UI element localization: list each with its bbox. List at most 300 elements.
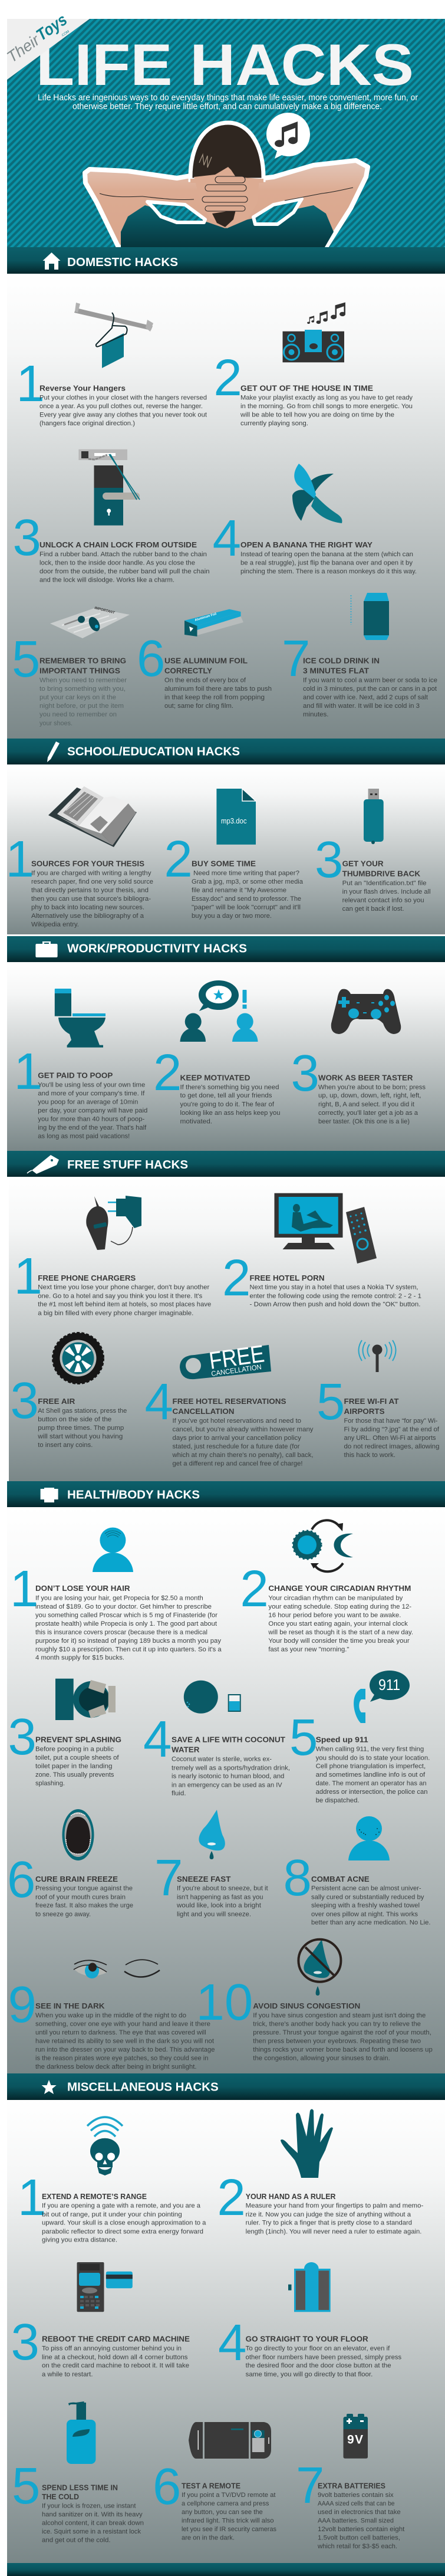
hack 3: work as beer taster: up, up, down, down, left, right, left, — [318, 1092, 421, 1100]
hack 10: avoid sinus congestion: then press between your eyebrows. Repeating these two — [253, 2038, 421, 2045]
hack 2: change your circadian rhythm: Your circadian rhythm can be manipulated by — [268, 1594, 403, 1602]
icon: two people talking — [180, 980, 258, 1042]
hack 3: prevent splashing — [8, 1679, 121, 1787]
icon: stereo and notes — [283, 302, 345, 362]
hack 1: free phone chargers: 1 — [14, 1248, 42, 1305]
hack 2: change your circadian rhythm — [240, 1520, 413, 1653]
band: work hacks — [7, 936, 445, 962]
hack 3: free air: will start without you having — [37, 1433, 123, 1440]
hack 1: free phone chargers: a big bin filled with every phone charger imaginable. — [38, 1310, 193, 1317]
icon: 9V battery: 9 V — [347, 2433, 363, 2447]
hack 5: spend less time in the cold — [12, 2401, 144, 2544]
hack 2: buy some time: Grab a jpg, mp3, or some other media — [192, 878, 304, 885]
hack 2: buy some time: BUY SOME TIME — [192, 860, 256, 868]
hack 5: speed up 911: date. The moment an operator has an — [316, 1780, 427, 1787]
hack 7: extra batteries — [296, 2414, 404, 2550]
hack 7: ice cold drink: and cover with ice. Next, add 2 cups of salt — [303, 694, 428, 701]
hack 5: remember important things: night before, or put the item — [39, 703, 124, 710]
hack 1: get paid to poop: as long as most paid vacations! — [38, 1133, 130, 1140]
hack 3: prevent splashing: 3 — [8, 1708, 37, 1766]
hack 5: speed up 911: you should do is to state your location. — [316, 1754, 430, 1761]
icon: card machine and card — [77, 2262, 133, 2312]
hack 5: speed up 911: be dispatched. — [316, 1797, 360, 1804]
panel: work and productivity hacks — [7, 936, 445, 1151]
hack 9: see in the dark: When you wake up in the middle of the night to do — [35, 2012, 186, 2019]
hack 3: prevent splashing: splashing. — [35, 1780, 65, 1787]
hack 4: open a banana: pinching the stem. There is a reason monkeys do it this way. — [240, 568, 417, 575]
hack 1: get paid to poop: GET PAID TO POOP — [38, 1072, 113, 1080]
hack 10: avoid sinus congestion: trick, there's another body hack you can try to relieve the — [253, 2021, 421, 2028]
hack 4: save a life with coconut water: Coconut water Is sterile, works ex- — [172, 1756, 272, 1763]
hack 7: ice cold drink — [282, 593, 437, 718]
hack 1: reverse your hangers: Every year give away any clothes that you never took out — [39, 412, 207, 419]
icon: free cancellation tag — [180, 1340, 271, 1379]
hack 5: speed up 911: 5 — [289, 1709, 318, 1766]
icon: usb drive — [364, 789, 384, 844]
icon: free cancellation tag: FREE — [207, 1340, 266, 1374]
hack 1: sources for your thesis — [6, 786, 153, 928]
hack 3: get your thumbdrive back: GET YOUR — [342, 860, 384, 868]
band: miscellaneous hacks: MISCELLANEOUS HACKS — [67, 2081, 219, 2093]
hack 1: sources for your thesis: SOURCES FOR YOUR THESIS — [31, 860, 144, 868]
hack 3: reboot the credit card machine: a while to restart. — [42, 2371, 93, 2378]
hack 10: avoid sinus congestion — [196, 1940, 433, 2062]
hack 9: see in the dark: have retained its ability to see well in the dark so you will not — [35, 2038, 214, 2045]
hack 3: work as beer taster: WORK AS BEER TASTER — [318, 1074, 413, 1082]
icon: star — [42, 2080, 57, 2094]
hack 6: test a remote: are on in the dark. — [182, 2535, 235, 2542]
hack 4: free hotel reservations cancellation: cancel, but you're already within however many — [172, 1426, 314, 1433]
hack 4: free hotel reservations cancellation: stated, just reschedule for a future date (for — [172, 1443, 300, 1451]
intro text: Life Hacks are ingenious ways to do everyday things that make life easier, more convenient, more fun, or — [38, 93, 418, 103]
person with hands behind head — [85, 123, 368, 247]
hack 1: extend a remote's range — [18, 2117, 206, 2244]
hack 2: free hotel porn — [222, 1193, 421, 1308]
hack 1: get paid to poop — [14, 989, 147, 1140]
icon: foil box: Aluminum Foil — [195, 612, 217, 622]
hack 4: free hotel reservations cancellation: 4 — [145, 1373, 173, 1430]
hack 2: buy some time: Essay.doc" and send to professor. The — [192, 895, 301, 903]
logo ribbon — [4, 10, 90, 80]
icon: sun and moon cycle — [293, 1520, 353, 1571]
hack 7: ice cold drink: and fill with water. It will be ice cold in 3 — [303, 703, 420, 710]
hack 2: change your circadian rhythm: Once you start eating again, your internal clock — [268, 1620, 408, 1627]
intro text: otherwise better. They require little effort, and can cumulatively make a big difference. — [72, 102, 382, 111]
hack 2: your hand as a ruler: Measure your hand from your fingertips to palm and memo- — [246, 2203, 424, 2210]
hack 1: free phone chargers: Next time you lose your phone charger, don't buy another — [38, 1284, 210, 1291]
icon: keys on paper — [50, 606, 130, 638]
hack 6: test a remote — [153, 2422, 276, 2542]
hack 5: spend less time in the cold: alcohol content, it can break down — [42, 2519, 144, 2526]
hack 4: save a life with coconut water: 4 — [143, 1711, 172, 1768]
hack 6: use aluminum foil correctly — [137, 609, 272, 710]
hack 1: free phone chargers: the #1 most left behind item at hotels, so most places have — [38, 1301, 211, 1308]
hack 2: get out of the house in time: 2 — [213, 349, 242, 406]
hack 2: keep motivated: looking like an ass helps keep you — [180, 1110, 281, 1117]
band: work hacks: WORK/PRODUCTIVITY HACKS — [67, 943, 247, 956]
hack 4: free hotel reservations cancellation: which at my chain there's no penalty), call back, — [172, 1452, 314, 1459]
icon: sanitizer bottle — [67, 2401, 95, 2464]
hack 7: extra batteries: AAA batteries. Small sized — [318, 2518, 394, 2525]
hack 7: extra batteries: EXTRA BATTERIES — [318, 2482, 385, 2490]
hack 3: unlock a chain lock: 3 — [13, 509, 41, 566]
hack 2: keep motivated: you're going to do it. The fear of — [180, 1101, 275, 1108]
hack 3: prevent splashing: zone. This usually prevents — [35, 1771, 114, 1778]
hack 1: don't lose your hair: 4 month supply for $15 bucks. — [35, 1655, 124, 1662]
hack 3: free air: pump three times. The pump — [38, 1425, 124, 1432]
hack 7: extra batteries: AAAA sized cells that can be — [318, 2500, 395, 2508]
hack 7: extra batteries: which retail for $3-$5 each. — [317, 2543, 397, 2550]
hack 4: open a banana — [213, 464, 417, 575]
hack 5: speed up 911 — [289, 1671, 430, 1804]
hack 7: sneeze fast: 7 — [154, 1849, 183, 1906]
hack 6: cure brain freeze: roof of your mouth cures brain — [35, 1894, 126, 1901]
hack 10: avoid sinus congestion: pressure. Thrust your tongue against the roof of your mouth, — [253, 2029, 431, 2036]
hack 4: free hotel reservations cancellation — [145, 1340, 314, 1467]
hack 2: keep motivated — [153, 980, 281, 1125]
hack 3: prevent splashing: toilet paper in the landing — [35, 1763, 112, 1770]
band: domestic hacks — [7, 247, 445, 274]
hack 6: test a remote: infrared light. This trick will also — [182, 2518, 274, 2525]
icon: tire — [53, 1333, 104, 1384]
hack 2: get out of the house in time: currently playing song. — [240, 420, 308, 427]
hack 4: save a life with coconut water: is nearly isotonic to human blood, and — [172, 1773, 284, 1780]
hack 4: free hotel reservations cancellation: get a different rep and cancel free of charge! — [172, 1460, 303, 1467]
hack 6: test a remote: If you point a TV/DVD remote at — [182, 2492, 276, 2499]
logo ribbon: Toys — [33, 10, 70, 44]
hack 5: spend less time in the cold: hand sanitizer on it. With its heavy — [42, 2511, 143, 2518]
hack 1: sources for your thesis: then you can use that source's bibliogra- — [31, 895, 151, 903]
hack 7: extra batteries: 12volt batteries contain eight — [318, 2526, 404, 2533]
hack 1: sources for your thesis: research paper, find one very solid source — [31, 878, 153, 885]
hack 3: reboot the credit card machine: line at a checkout, hold down all 4 corner buttons — [42, 2354, 188, 2361]
hack 1: don't lose your hair — [10, 1528, 222, 1662]
hack 2: free hotel porn: enter the following code using the remote control: 2 - 2 - 1 — [250, 1292, 421, 1300]
hack 5: spend less time in the cold: If your lock is frozen, use instant — [42, 2503, 136, 2510]
icon: free cancellation tag: CANCELLATION — [210, 1363, 262, 1378]
hack 8: combat acne: better than any acne medication. No Lie. — [311, 1919, 430, 1927]
hack 2: change your circadian rhythm: fast as your new "morning." — [268, 1646, 349, 1653]
hack 5: free wi-fi at airports: FREE WI-FI AT — [344, 1397, 399, 1406]
hack 2: change your circadian rhythm: Your body will consider the time you break your — [268, 1638, 410, 1645]
icon: 9V battery — [343, 2414, 368, 2459]
hack 7: sneeze fast: SNEEZE FAST — [177, 1875, 231, 1883]
hack 3: unlock a chain lock: lock, then to the inside door handle. As you close the — [39, 560, 195, 567]
hack 5: speed up 911: Speed up 911 — [316, 1736, 368, 1744]
hack 1: free phone chargers — [14, 1196, 211, 1317]
icon: price tag — [27, 1155, 59, 1174]
hack 2: your hand as a ruler: rize it. Now you can judge the size of anything without a — [246, 2211, 411, 2218]
icon: game controller — [331, 989, 401, 1034]
hack 8: combat acne — [283, 1816, 430, 1927]
hack 8: combat acne: sleeping with a freshly washed towel — [311, 1902, 420, 1909]
panel: school and education hacks — [6, 739, 445, 934]
hack 5: speed up 911: When calling 911, the very first thing — [316, 1746, 424, 1753]
icon: person with acne — [348, 1816, 390, 1860]
hack 1: free phone chargers: one. Go to a hotel and say you think you lost it there. It's — [38, 1292, 203, 1300]
icon: toilet from above — [55, 1679, 116, 1720]
hack 4: go straight to your floor: To go directly to your floor on an elevator, even if — [246, 2345, 390, 2352]
band: health hacks — [7, 1481, 445, 1507]
hack 3: get your thumbdrive back: relevant contact info so you — [342, 897, 424, 904]
icon: open book — [48, 786, 137, 847]
hack 5: spend less time in the cold: THE COLD — [42, 2493, 79, 2501]
hack 4: free hotel reservations cancellation: CANCELLATION — [172, 1407, 235, 1416]
hack 9: see in the dark: is the reason pirates wore eye patches, so they could see in — [35, 2055, 208, 2062]
icon: coconut and glass — [184, 1681, 240, 1714]
hack 1: get paid to poop: ing by the end of the year. That's half — [38, 1124, 147, 1131]
hack 3: unlock a chain lock: Find a rubber band. Attach the rubber band to the chain — [39, 551, 207, 558]
hack 4: go straight to your floor: other floor numbers have been pressed, simply press — [246, 2354, 402, 2361]
hack 6: test a remote: TEST A REMOTE — [182, 2482, 240, 2490]
hack 4: open a banana: OPEN A BANANA THE RIGHT WAY — [240, 541, 373, 549]
hack 2: get out of the house in time: Make your playlist exactly as long as you have to get ready — [240, 394, 413, 401]
hack 3: work as beer taster: beer taster. (Ok this one is a lie) — [318, 1118, 410, 1125]
hack 6: cure brain freeze: CURE BRAIN FREEZE — [35, 1875, 118, 1883]
hack 5: remember important things: you need to remember on — [39, 711, 117, 718]
hack 6: test a remote: any button, you can see the — [182, 2509, 263, 2516]
hack 2: free hotel porn: Next time you stay in a hotel that uses a Nokia TV system, — [250, 1284, 418, 1291]
hack 7: ice cold drink: ICE COLD DRINK IN — [303, 657, 380, 665]
intro text — [38, 93, 418, 111]
hack 4: go straight to your floor — [218, 2262, 402, 2378]
band: free stuff hacks — [7, 1151, 445, 1177]
hack 4: save a life with coconut water: tremely well as a sports/hydration drink, — [172, 1764, 290, 1771]
hack 2: change your circadian rhythm: 2 — [240, 1560, 269, 1617]
hack 5: free wi-fi at airports — [317, 1340, 440, 1459]
hack 1: sources for your thesis: 1 — [6, 831, 34, 888]
hack 2: buy some time: 2 — [164, 831, 193, 888]
hack 8: combat acne: over ones pillow at night. This works — [311, 1911, 418, 1918]
hack 5: remember important things: When you need to remember — [39, 677, 127, 684]
hack 3: get your thumbdrive back: can get it back if lost. — [342, 905, 404, 913]
hack 6: cure brain freeze: to sneeze go away. — [35, 1911, 91, 1918]
hack 4: free hotel reservations cancellation: FREE HOTEL RESERVATIONS — [172, 1397, 286, 1406]
hack 7: sneeze fast — [154, 1810, 268, 1918]
hack 3: free air: 3 — [11, 1372, 39, 1429]
hack 2: keep motivated: to get done, tell all your friends — [180, 1092, 272, 1100]
hack 2: get out of the house in time: will be able to tell how you are doing on time by the — [240, 412, 394, 419]
hack 7: extra batteries: 1.5volt button cell batteries, — [318, 2535, 400, 2542]
hack 7: sneeze fast: If you're about to sneeze, but it — [177, 1885, 268, 1892]
hack 1: get paid to poop: you poop for an average of 10min — [38, 1098, 138, 1105]
hack 6: test a remote: let you see if IR security cameras — [182, 2526, 276, 2533]
hack 5: remember important things: REMEMBER TO BRING — [39, 657, 126, 665]
hack 1: extend a remote's range: bit out of range, put it under your chin pointing — [42, 2211, 182, 2218]
title: LIFE HACKS — [36, 32, 414, 97]
hack 7: sneeze fast: isn't happening as fast as you — [177, 1894, 263, 1901]
hack 5: free wi-fi at airports: AIRPORTS — [344, 1407, 384, 1416]
hack 7: sneeze fast: light and you will sneeze. — [177, 1911, 251, 1918]
hack 1: extend a remote's range: EXTEND A REMOTE’S RANGE — [42, 2193, 147, 2201]
hack 9: see in the dark: 9 — [8, 1976, 37, 2033]
icon: hanger — [74, 303, 153, 368]
hack 4: open a banana: be a real struggle), just flip the banana over and open it by — [240, 560, 413, 567]
hack 2: keep motivated: motivated. — [180, 1118, 212, 1125]
band: domestic hacks: DOMESTIC HACKS — [67, 256, 178, 269]
hack 1: reverse your hangers — [17, 303, 207, 427]
hack 1: don't lose your hair: you something called Proscar which is 5 mg of Finasteride (for — [35, 1612, 217, 1619]
hack 3: free air: FREE AIR — [38, 1397, 75, 1406]
hack 4: save a life with coconut water: WATER — [172, 1745, 199, 1754]
hack 5: free wi-fi at airports: any URL. Often Wi-Fi at airports — [344, 1435, 436, 1442]
panel: miscellaneous hacks — [7, 2073, 445, 2563]
hack 6: use aluminum foil correctly: USE ALUMINUM FOIL — [164, 657, 248, 665]
hack 7: sneeze fast: would like, look into a bright — [176, 1902, 261, 1909]
hack 7: ice cold drink: If you want to cool a warm beer or soda to ice — [303, 677, 437, 684]
icon: hand — [281, 2109, 333, 2178]
hero panel — [4, 10, 445, 247]
hack 1: get paid to poop: per day, your company will have paid — [38, 1107, 147, 1114]
icon: elevator — [288, 2262, 331, 2312]
hack 2: buy some time: Need more time writing that paper? — [193, 869, 299, 877]
hack 2: your hand as a ruler: 2 — [217, 2169, 246, 2226]
hack 2: your hand as a ruler — [217, 2109, 424, 2235]
hack 4: free hotel reservations cancellation: days prior to arrival your cancellation policy — [172, 1435, 302, 1442]
hack 2: buy some time: file and rename it "My Awesome — [192, 887, 286, 894]
hack 8: combat acne: 8 — [283, 1849, 312, 1906]
hack 5: remember important things: IMPORTANT THINGS — [39, 667, 120, 675]
icon: tv and remote — [275, 1193, 377, 1264]
hack 5: speed up 911: and sometimes landline info is out of — [316, 1771, 426, 1778]
hack 3: reboot the credit card machine — [11, 2262, 190, 2378]
band: free stuff hacks: FREE STUFF HACKS — [67, 1159, 188, 1171]
hack 3: unlock a chain lock: and the lock will dislodge. Works like a charm. — [39, 577, 174, 584]
hack 1: extend a remote's range: upward. Your skull is a close enough approximation to a — [42, 2220, 206, 2227]
hack 5: free wi-fi at airports: 5 — [317, 1373, 345, 1430]
hack 7: ice cold drink: 7 — [282, 630, 310, 687]
hack 2: get out of the house in time: GET OUT OF THE HOUSE IN TIME — [240, 385, 373, 393]
hack 3: work as beer taster: When you're about to be born; press — [318, 1084, 426, 1091]
hack 6: use aluminum foil correctly: CORRECTLY — [164, 667, 213, 675]
hack 1: get paid to poop: 1 — [14, 1043, 42, 1100]
icon: person with hair — [93, 1528, 133, 1572]
hack 3: prevent splashing: Before pooping in a public — [35, 1746, 114, 1753]
hack 4: open a banana: Instead of tearing open the banana at the stem (which can — [240, 551, 413, 558]
hack 3: work as beer taster: right, B, A and select. If you did it — [318, 1101, 414, 1108]
hack 1: reverse your hangers: 1 — [17, 355, 45, 412]
icon: skull with signal waves — [87, 2117, 123, 2175]
hack 6: cure brain freeze — [7, 1809, 133, 1918]
hack 1: don't lose your hair: this is insurance covers proscar (because there is a medical — [35, 1629, 207, 1636]
hack 2: free hotel porn: - Down Arrow then push and hold down the "OK" button. — [250, 1301, 421, 1308]
hack 9: see in the dark: something, cover one eye with your hand and leave it there — [35, 2021, 210, 2028]
hack 8: combat acne: sally cured or substantially reduced by — [311, 1894, 424, 1901]
hack 3: get your thumbdrive back: 3 — [315, 831, 343, 888]
icon: briefcase — [35, 941, 58, 957]
hack 1: reverse your hangers: once a year. As you pull clothes out, reverse the hanger. — [39, 403, 203, 410]
hack 3: reboot the credit card machine: 3 — [11, 2314, 39, 2371]
hack 3: work as beer taster: 3 — [291, 1045, 319, 1102]
hack 7: ice cold drink: cold in 3 minutes, put the can or cans in a pot — [303, 685, 437, 693]
hack 4: free hotel reservations cancellation: If you've got hotel reservations and need to — [172, 1417, 301, 1425]
hack 3: reboot the credit card machine: To piss off an annoying customer behind you in — [42, 2345, 182, 2352]
hack 2: free hotel porn: 2 — [222, 1249, 250, 1307]
icon: phone charger — [86, 1196, 141, 1250]
hack 6: test a remote: 6 — [153, 2458, 181, 2515]
icon: crossed-out nose — [298, 1940, 341, 1996]
hack 2: buy some time — [164, 789, 304, 920]
hack 4: save a life with coconut water: in an emergency can be used as an IV — [172, 1781, 282, 1789]
hack 2: keep motivated: 2 — [153, 1044, 182, 1101]
hack 10: avoid sinus congestion: 10 — [196, 1974, 253, 2031]
hack 3: free air — [11, 1333, 127, 1449]
hack 2: get out of the house in time — [213, 302, 413, 427]
speech bubble with music note — [266, 113, 310, 159]
hack 5: free wi-fi at airports: do not redirect images, allowing — [344, 1443, 440, 1451]
hack 5: spend less time in the cold: and get out of the cold. — [42, 2536, 111, 2544]
hack 5: remember important things: 5 — [12, 631, 40, 688]
hack 9: see in the dark: run into the dresser on your way back to bed. This advantage — [35, 2046, 215, 2053]
icon: open mouth — [62, 1809, 94, 1860]
hack 4: go straight to your floor: same time, you will go directly to that floor. — [246, 2371, 373, 2378]
icon: nose and drop — [199, 1810, 225, 1859]
hack 4: save a life with coconut water: fluid. — [172, 1790, 186, 1797]
panel: free stuff hacks — [7, 1151, 445, 1481]
hack 1: get paid to poop: and more of your company's time. If — [38, 1090, 145, 1097]
hack 2: change your circadian rhythm: will be reset as though it is the start of a new day. — [268, 1629, 413, 1636]
hack 3: get your thumbdrive back: THUMBDRIVE BACK — [342, 870, 420, 878]
hack 1: don't lose your hair: 1 — [10, 1560, 38, 1617]
icon: mp3.doc file — [216, 789, 256, 845]
hack 1: get paid to poop: you for more than 40 hours of poop- — [38, 1115, 145, 1123]
icon: door with chain lock — [78, 449, 140, 526]
hack 3: prevent splashing: toilet, put a couple sheets of — [35, 1754, 120, 1761]
hack 1: extend a remote's range: parabolic reflector to direct some extra energy forward — [42, 2228, 203, 2235]
hack 4: save a life with coconut water: SAVE A LIFE WITH COCONUT — [172, 1736, 285, 1744]
hack 1: reverse your hangers: (hangers face original direction.) — [39, 420, 135, 427]
hack 9: see in the dark: until you return to darkness. The eye that was covered will — [35, 2029, 206, 2036]
hack 7: extra batteries: 9volt batteries contain six — [318, 2492, 394, 2499]
icon: cross — [41, 1486, 58, 1502]
hack 1: extend a remote's range: 1 — [18, 2169, 46, 2226]
hack 4: save a life with coconut water — [143, 1681, 290, 1797]
icon: keys on paper: IMPORTANT — [94, 606, 116, 615]
hack 5: free wi-fi at airports: Fi by adding “?.jpg” at the end of — [344, 1426, 440, 1433]
hack 2: change your circadian rhythm: 16 hour period before you want to be awake. — [268, 1612, 401, 1619]
band: health hacks: HEALTH/BODY HACKS — [67, 1489, 200, 1502]
hack 3: get your thumbdrive back: Put an "Identification.txt" file — [342, 880, 427, 887]
hack 6: test a remote: a cellphone camera and press — [182, 2500, 269, 2508]
icon: peeled banana — [292, 464, 342, 523]
footer band — [7, 2563, 445, 2576]
band: school hacks — [7, 739, 445, 764]
hack 3: prevent splashing: PREVENT SPLASHING — [35, 1736, 121, 1744]
hack 3: get your thumbdrive back — [315, 789, 431, 913]
hack 3: unlock a chain lock — [13, 449, 210, 584]
hack 2: change your circadian rhythm: your eating schedule. Stop eating during the 12- — [268, 1603, 411, 1610]
hack 1: don't lose your hair: roughly $10 a prescription. Then cut it up into quarters. So it's a — [35, 1646, 222, 1653]
hack 6: use aluminum foil correctly: aluminum foil there are tabs to push — [164, 685, 272, 693]
hack 5: speed up 911: address or intersection, the police can — [316, 1789, 428, 1796]
hack 2: your hand as a ruler: ruler. Try to pick a finger that is pretty close to a standard — [246, 2220, 412, 2227]
hack 6: cure brain freeze: Pressing your tongue against the — [35, 1885, 133, 1892]
hack 4: go straight to your floor: the desired floor and the door close button at the — [246, 2362, 391, 2370]
hack 3: work as beer taster: correctly, you'll later get a job as a — [318, 1110, 418, 1117]
panel: domestic hacks — [7, 247, 445, 739]
logo ribbon: .COM — [61, 30, 70, 38]
hack 5: free wi-fi at airports: For those that have “for pay” Wi- — [344, 1417, 438, 1425]
hack 1: sources for your thesis: phy to back into locating new sources. — [31, 904, 144, 911]
hack 1: sources for your thesis: Wikipedia entry. — [31, 921, 79, 928]
icon: foil box — [184, 609, 243, 636]
hack 5: remember important things — [12, 606, 130, 727]
hack 1: don't lose your hair: DON’T LOSE YOUR HAIR — [35, 1584, 130, 1593]
hack 6: use aluminum foil correctly: in that keep the roll from popping — [164, 694, 265, 701]
hack 3: reboot the credit card machine: on the credit card machine to reboot it. It will take — [42, 2362, 189, 2370]
icon: mp3.doc file: mp3.doc — [221, 816, 247, 825]
hack 1: don't lose your hair: prostate health) while Propecia is only 1. The good part about — [35, 1620, 217, 1627]
